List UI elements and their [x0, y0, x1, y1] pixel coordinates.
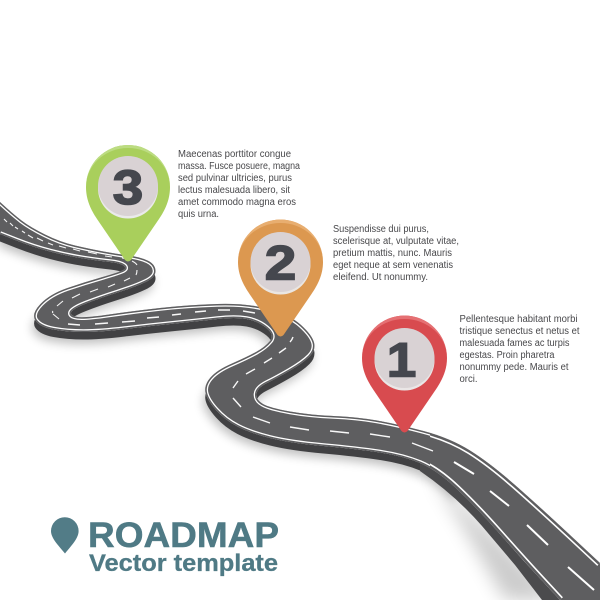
center dashes: far section — [4, 219, 137, 319]
subtitle: Vector template — [89, 550, 278, 577]
text block 2: Suspendisse dui purus, — [333, 224, 429, 235]
text block 3: amet commodo magna eros — [178, 197, 296, 208]
text block 2: eget neque at sem venenatis — [333, 260, 453, 271]
number 3: 3 — [113, 160, 143, 214]
text block 2 — [333, 224, 459, 283]
number 1: 1 — [387, 333, 416, 387]
text block 3: lectus malesuada libero, sit — [178, 185, 290, 196]
title: ROADMAP — [88, 516, 279, 555]
center dashes: middle section — [68, 310, 433, 451]
text block 2: eleifend. Ut nonummy. — [333, 272, 428, 283]
text block 3 — [178, 149, 300, 220]
text block 1: orci. — [460, 374, 478, 385]
text block 3: Maecenas porttitor congue — [178, 149, 291, 160]
text block 1: egestas. Proin pharetra — [460, 350, 555, 361]
pin 2 — [238, 220, 323, 336]
icon: location marker — [51, 517, 79, 554]
text block 2: pretium mattis, nunc. Mauris — [333, 248, 452, 259]
number 2: 2 — [265, 237, 296, 290]
pin 3 — [86, 145, 170, 262]
text block 3: quis urna. — [178, 209, 219, 220]
text block 3: sed pulvinar ultricies, purus — [178, 173, 292, 184]
road — [0, 202, 600, 600]
text block 1: tristique senectus et netus et — [460, 326, 580, 337]
pin 1 — [362, 316, 447, 432]
text block 1: malesuada fames ac turpis — [460, 338, 570, 349]
text block 1 — [460, 314, 580, 385]
text block 1: Pellentesque habitant morbi — [460, 314, 578, 325]
center dashes: near section — [454, 462, 594, 590]
text block 1: nonummy pede. Mauris et — [460, 362, 569, 373]
text block 2: scelerisque at, vulputate vitae, — [333, 236, 459, 247]
text block 3: massa. Fusce posuere, magna — [178, 161, 300, 172]
